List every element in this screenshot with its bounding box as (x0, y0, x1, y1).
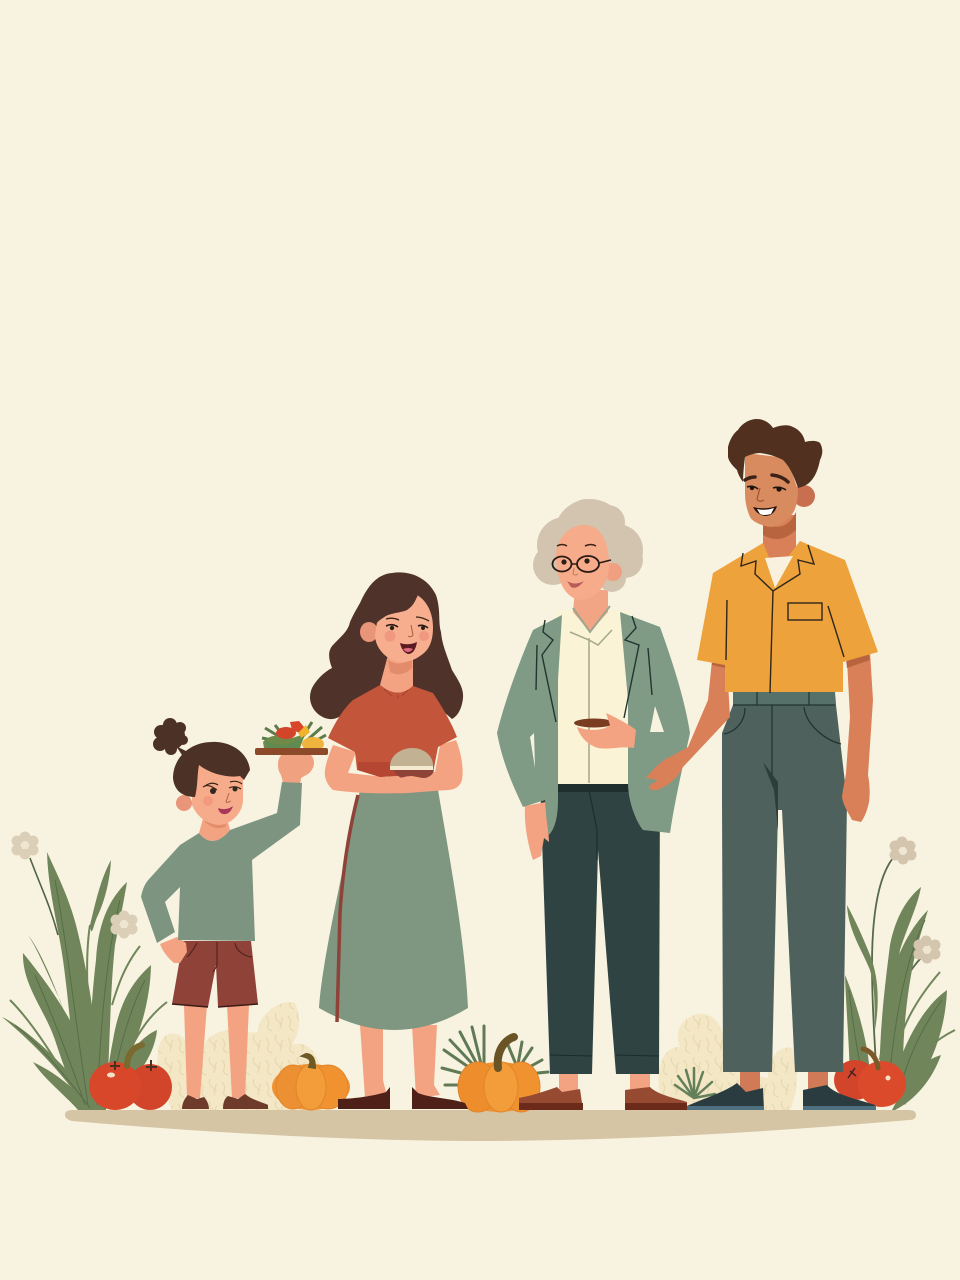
child hair (173, 742, 250, 797)
tomato stem (127, 1045, 142, 1066)
grandmother jacket gap (650, 706, 664, 732)
plate of food (255, 721, 328, 755)
plant stem: tall flower (30, 858, 58, 935)
grandmother jacket left (497, 615, 562, 835)
child hand on hip (160, 937, 187, 963)
grandmother dish (574, 718, 614, 728)
grandmother face (556, 525, 609, 600)
centre pumpkin (458, 1037, 540, 1112)
left pumpkin (272, 1054, 350, 1110)
mother features (384, 617, 429, 654)
child shirt (141, 782, 302, 943)
small fern by centre pumpkin (442, 1026, 548, 1085)
child bun (153, 718, 188, 758)
mother hand (380, 776, 428, 793)
mother hair (310, 572, 463, 719)
right flower lower (914, 936, 940, 964)
father trousers (722, 692, 847, 1072)
father face (745, 453, 798, 527)
grandmother hair (533, 499, 643, 592)
right plant (845, 858, 955, 1110)
grandmother lapels (536, 616, 652, 722)
right tomatoes (834, 1049, 906, 1107)
grandmother trousers (540, 780, 660, 1074)
child raised hand (278, 753, 314, 786)
child ear (176, 795, 192, 811)
ground shadow (65, 1110, 916, 1141)
mother skirt (319, 790, 468, 1030)
mother neck (380, 655, 413, 693)
child neck (199, 815, 230, 841)
father neck (763, 515, 796, 560)
child features (203, 781, 242, 814)
plant thin blades and veins (10, 925, 167, 1085)
plant stems (872, 858, 921, 1070)
mother bowl (390, 748, 433, 767)
grandmother shoes (519, 1087, 687, 1110)
mother arms (325, 740, 463, 793)
plant thin blades (898, 972, 955, 1075)
child figure (141, 718, 328, 1109)
father right arm (842, 652, 873, 822)
father hair (728, 419, 822, 488)
child shoes (182, 1094, 268, 1109)
right shrub (658, 1014, 797, 1110)
plant leaves (845, 887, 947, 1110)
grandmother ear (604, 563, 622, 581)
mother face (375, 595, 433, 662)
mother figure (310, 572, 468, 1109)
father left arm (646, 660, 730, 790)
father shirt (697, 541, 878, 692)
grandmother jacket slit (530, 733, 535, 768)
mother fringe (372, 585, 419, 624)
mother shoes (338, 1087, 468, 1109)
father ankles (740, 1068, 828, 1092)
right flower top (890, 836, 916, 864)
left tomatoes (89, 1045, 172, 1110)
grandmother ankles (559, 1070, 650, 1092)
grandmother neck (573, 590, 608, 632)
grandmother glasses and features (552, 544, 611, 588)
father shoes (687, 1083, 875, 1110)
grandmother jacket right (620, 612, 690, 833)
pumpkin stem (302, 1054, 315, 1068)
grandmother hand (577, 713, 636, 749)
grandmother left hand (525, 802, 549, 860)
father features (745, 475, 788, 516)
grandmother figure (497, 499, 690, 1110)
child shorts (172, 941, 258, 1007)
grandmother shirt (556, 610, 630, 785)
mother legs (360, 1025, 440, 1098)
left shrub (157, 1002, 322, 1110)
left flower top (12, 832, 38, 860)
child face (192, 760, 243, 825)
pumpkin stem (498, 1037, 514, 1068)
father shirt lines (726, 545, 844, 693)
left plant (2, 852, 167, 1110)
small fern by right shrub (675, 1068, 715, 1098)
father undershirt (765, 556, 793, 588)
mother ear (360, 622, 378, 642)
left flower lower (110, 910, 138, 938)
child legs (184, 1005, 249, 1098)
tomato stem (863, 1049, 878, 1068)
mother top (328, 685, 457, 777)
father ear (793, 485, 815, 507)
plant leaves (2, 852, 157, 1110)
father figure (646, 419, 878, 1110)
